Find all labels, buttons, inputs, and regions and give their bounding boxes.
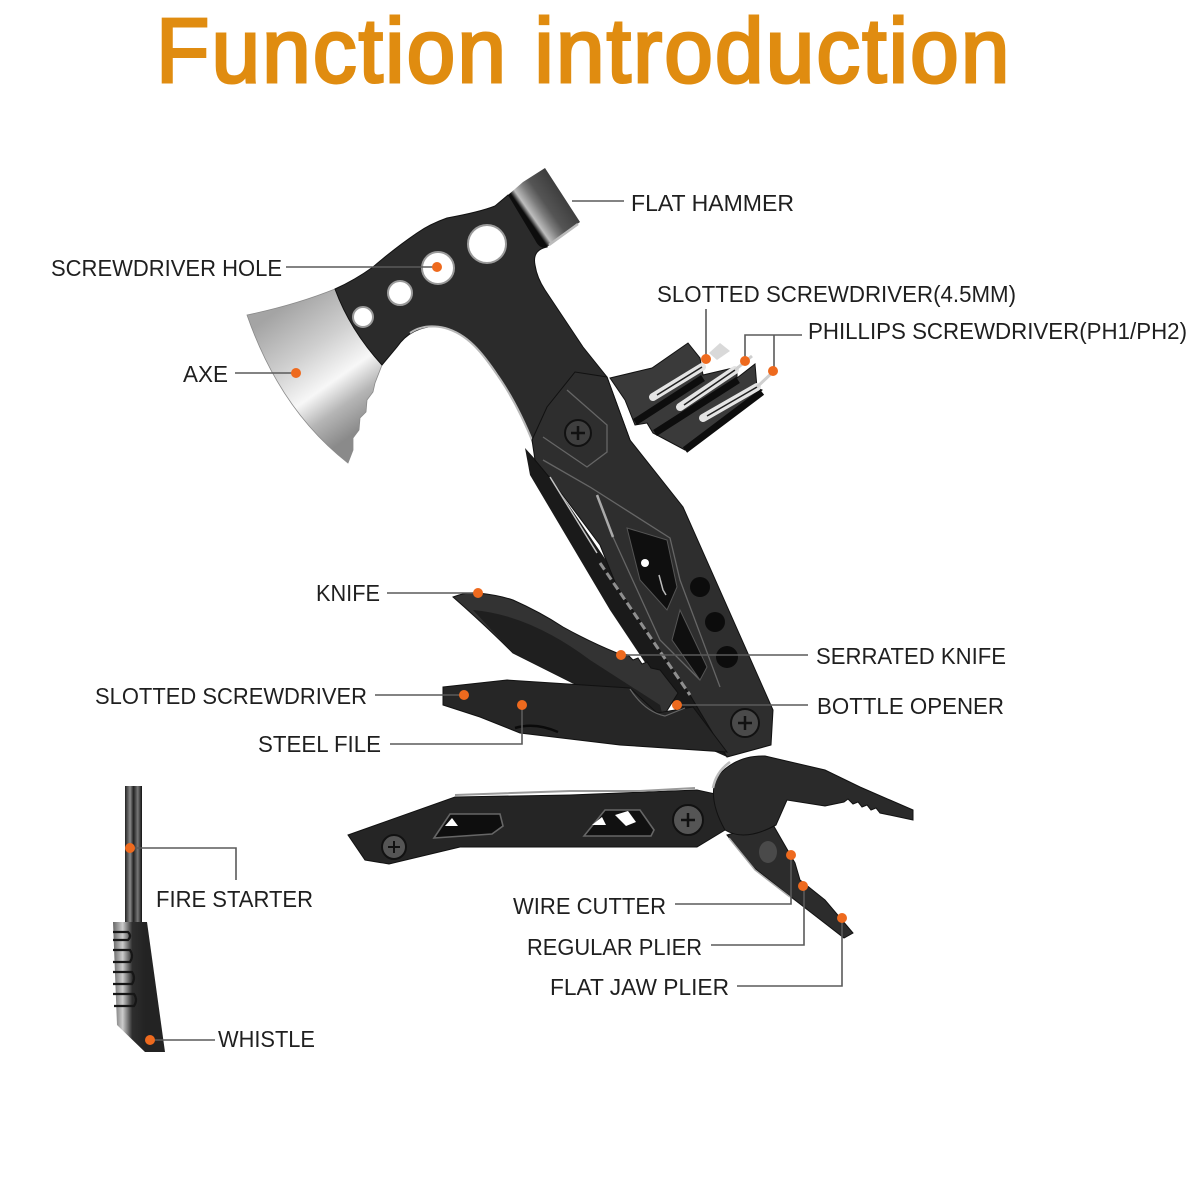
plier upper jaw and pivot xyxy=(713,756,913,835)
bit holder shadow grooves xyxy=(635,378,762,450)
leader lines xyxy=(130,201,842,1040)
labels: FLAT HAMMER xyxy=(631,190,794,216)
fire starter xyxy=(125,786,142,922)
slotted bit tip xyxy=(709,343,730,360)
plier screw right xyxy=(673,805,703,835)
neck silver edge xyxy=(410,326,534,445)
knife lower grind xyxy=(473,610,663,717)
handle gear strip xyxy=(600,563,690,695)
axe head and neck xyxy=(335,195,630,445)
labels: STEEL FILE xyxy=(258,731,381,757)
labels: WHISTLE xyxy=(218,1026,315,1052)
handle cutouts xyxy=(627,528,677,610)
labels: WIRE CUTTER xyxy=(513,893,666,919)
labels: AXE xyxy=(183,361,228,387)
labels: FIRE STARTER xyxy=(156,886,313,912)
labels: SERRATED KNIFE xyxy=(816,643,1006,669)
flat hammer head xyxy=(508,168,580,248)
labels xyxy=(51,190,1187,1052)
hammer underside highlight xyxy=(549,224,578,245)
bit holder xyxy=(610,343,774,450)
labels: SLOTTED SCREWDRIVER xyxy=(95,683,367,709)
labels: KNIFE xyxy=(316,580,380,606)
labels: REGULAR PLIER xyxy=(527,934,702,960)
handle screw bottom xyxy=(731,709,759,737)
handle top serration xyxy=(455,788,695,795)
knife blade xyxy=(453,593,678,717)
handle screw top xyxy=(565,420,591,446)
marker dots xyxy=(125,262,847,1045)
plier jaw silver edge xyxy=(729,838,790,897)
handle plate xyxy=(532,372,773,757)
phillips bit 2 xyxy=(703,371,774,418)
multitool upper body xyxy=(247,168,774,757)
pivot silver edge xyxy=(713,762,730,788)
whistle xyxy=(113,922,165,1052)
plier lower handle xyxy=(348,790,725,864)
labels: SLOTTED SCREWDRIVER(4.5MM) xyxy=(657,281,1016,307)
inner blade behind handle xyxy=(525,448,727,757)
handle contour lines xyxy=(543,390,720,687)
screwdriver holes xyxy=(353,225,506,327)
plier handle cutouts xyxy=(434,814,503,838)
plier lower jaw xyxy=(727,823,853,938)
pliers xyxy=(348,756,913,938)
steel file and slotted screwdriver xyxy=(443,680,727,752)
handle cutout 2 xyxy=(672,610,707,680)
plier jaw rivet xyxy=(759,841,777,863)
blade edge silver line xyxy=(550,477,597,553)
silver strip inside handle xyxy=(597,495,613,537)
labels: FLAT JAW PLIER xyxy=(550,974,729,1000)
title: Function introduction xyxy=(156,0,1009,101)
slotted bit xyxy=(653,367,702,397)
plier handle cutout 2 xyxy=(584,810,654,836)
labels: PHILLIPS SCREWDRIVER(PH1/PH2) xyxy=(808,318,1187,344)
plier screw left xyxy=(382,835,406,859)
labels: SCREWDRIVER HOLE xyxy=(51,255,282,281)
labels: BOTTLE OPENER xyxy=(817,693,1004,719)
phillips bit 1 xyxy=(680,356,752,407)
axe blade xyxy=(247,289,382,463)
handle holes xyxy=(690,577,738,668)
